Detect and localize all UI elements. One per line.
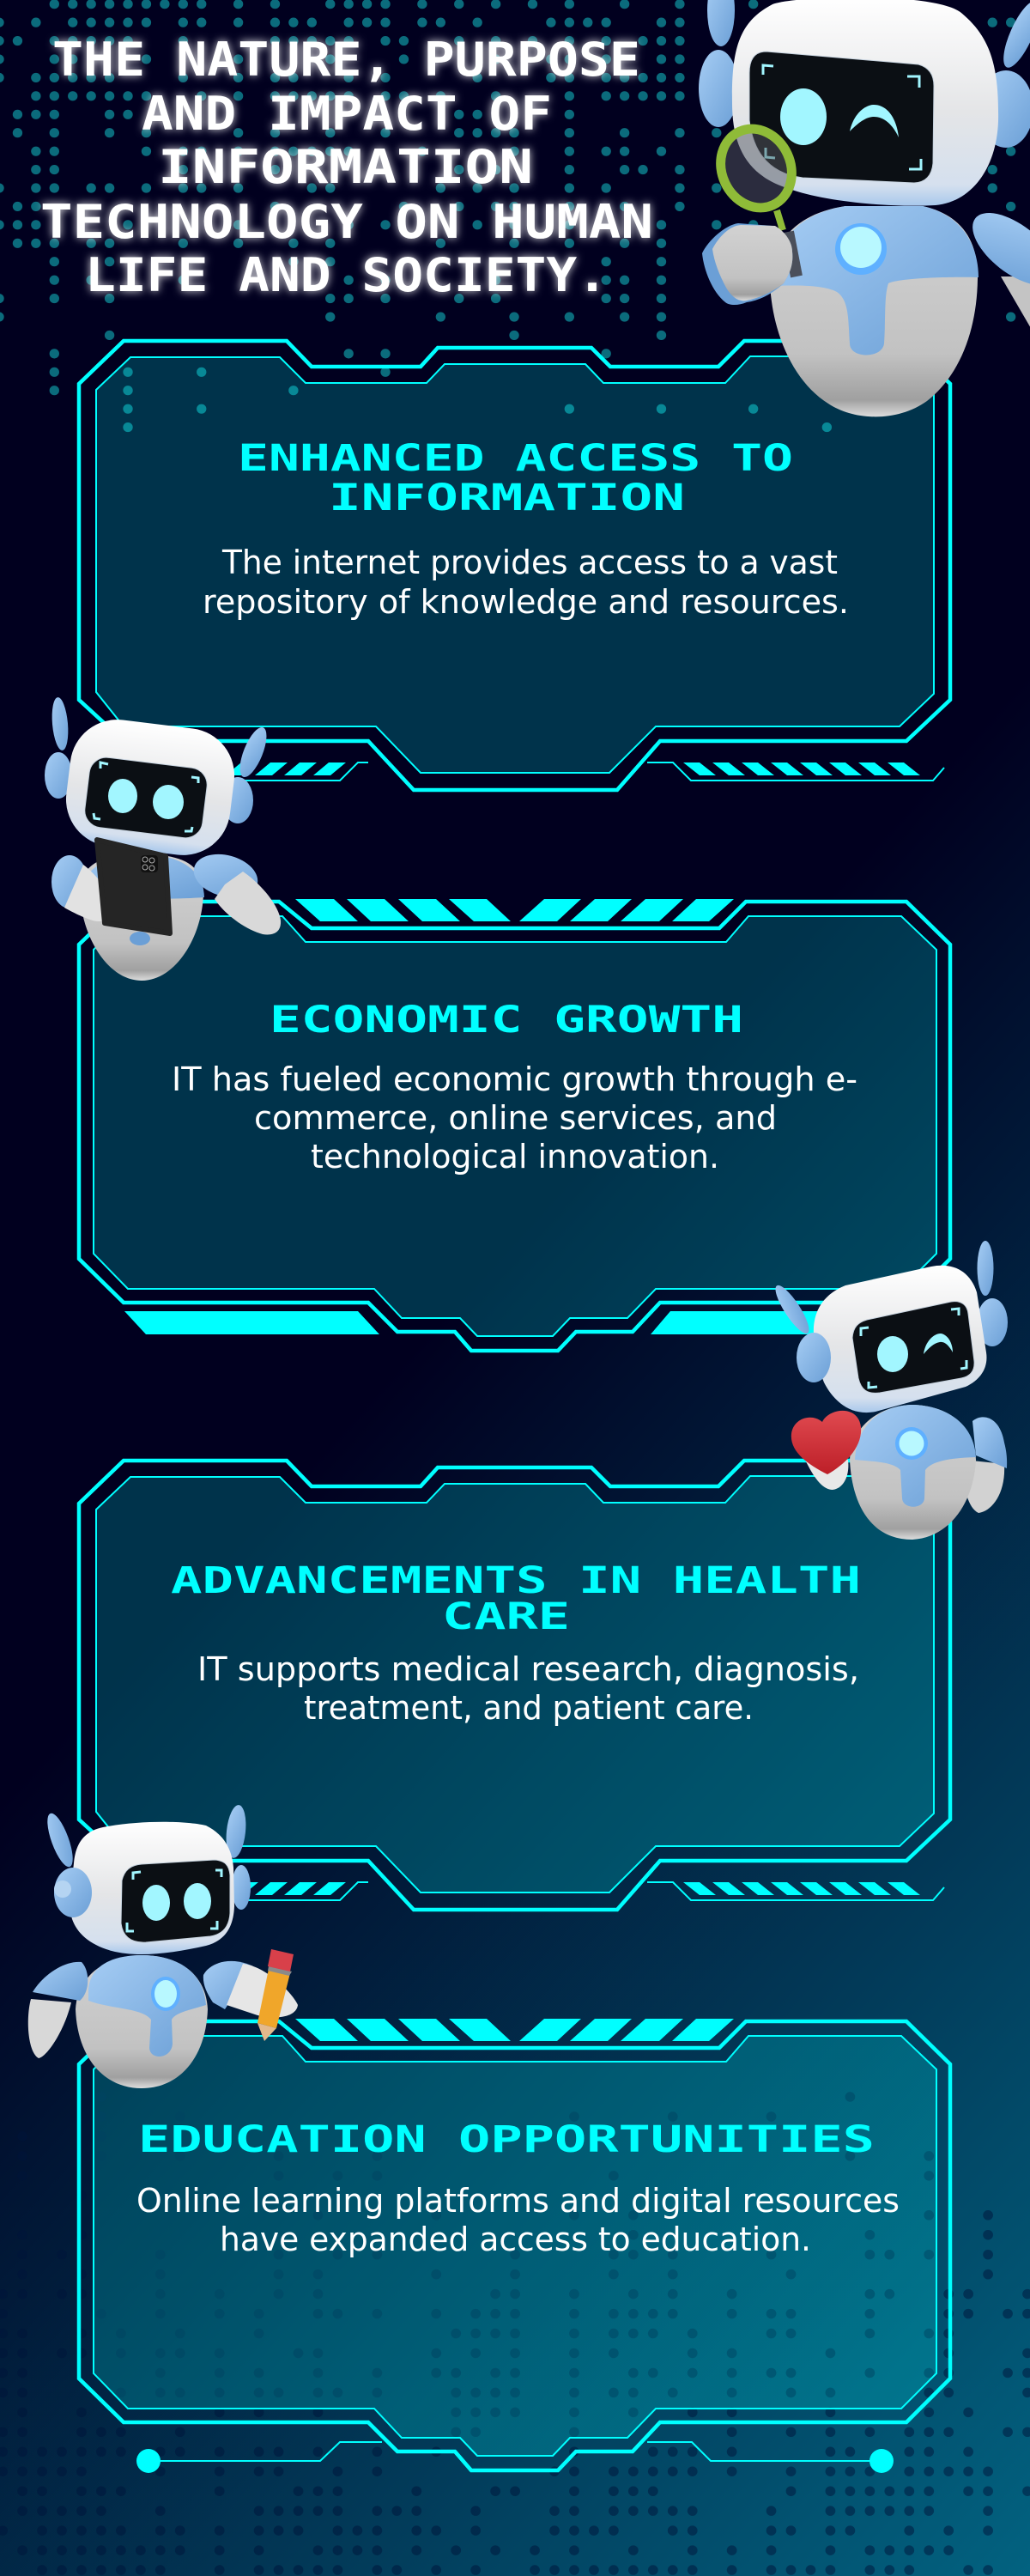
panel heading: ECONOMIC GROWTH xyxy=(270,999,743,1042)
panel body text: treatment, and patient care. xyxy=(304,1689,754,1727)
panel body text xyxy=(203,544,849,621)
panel body text xyxy=(197,1650,859,1727)
panel frame xyxy=(79,341,950,790)
panel body text: IT supports medical research, diagnosis, xyxy=(197,1650,859,1688)
icon: robot holding phone xyxy=(45,696,281,981)
panel heading: INFORMATION xyxy=(329,477,685,519)
panel body text xyxy=(136,2182,900,2258)
panel frame xyxy=(79,2019,950,2470)
panel heading: ENHANCED ACCESS TO xyxy=(238,437,793,480)
panel body text: have expanded access to education. xyxy=(220,2221,811,2258)
bottom dark dot matrix xyxy=(3,2097,1027,2570)
panel frame xyxy=(79,1461,950,1910)
panel heading: ADVANCEMENTS IN HEALTH xyxy=(171,1559,861,1602)
panel body text: IT has fueled economic growth through e- xyxy=(172,1060,857,1098)
panel: education opportunities xyxy=(79,2019,950,2473)
panel: enhanced access to information xyxy=(79,341,950,790)
icon: robot holding heart xyxy=(770,1241,1008,1540)
panel heading xyxy=(171,1559,861,1638)
title: INFORMATION xyxy=(158,140,533,194)
panel body text: The internet provides access to a vast xyxy=(221,544,838,581)
panel body text: commerce, online services, and xyxy=(254,1099,777,1137)
panel body text: technological innovation. xyxy=(311,1138,719,1176)
panel heading xyxy=(238,437,793,519)
icon: robot with magnifying glass xyxy=(699,0,1030,416)
title: AND IMPACT OF xyxy=(142,87,552,141)
panel body text: Online learning platforms and digital resources xyxy=(136,2182,900,2220)
top teal dot matrix xyxy=(0,4,1011,428)
panel frame xyxy=(79,899,950,1351)
panel body text xyxy=(172,1060,857,1176)
panel: economic growth xyxy=(79,899,950,1351)
title: THE NATURE, PURPOSE xyxy=(52,33,640,87)
panel heading: CARE xyxy=(442,1595,570,1638)
icon: robot holding pencil xyxy=(28,1804,298,2088)
circuit line with end dots xyxy=(136,2442,894,2473)
title: TECHNOLOGY ON HUMAN xyxy=(40,195,653,249)
panel body text: repository of knowledge and resources. xyxy=(203,583,849,621)
title: LIFE AND SOCIETY. xyxy=(85,248,608,302)
title xyxy=(40,33,653,302)
panel: advancements in health care xyxy=(79,1461,950,1910)
panel heading: EDUCATION OPPORTUNITIES xyxy=(138,2118,875,2161)
